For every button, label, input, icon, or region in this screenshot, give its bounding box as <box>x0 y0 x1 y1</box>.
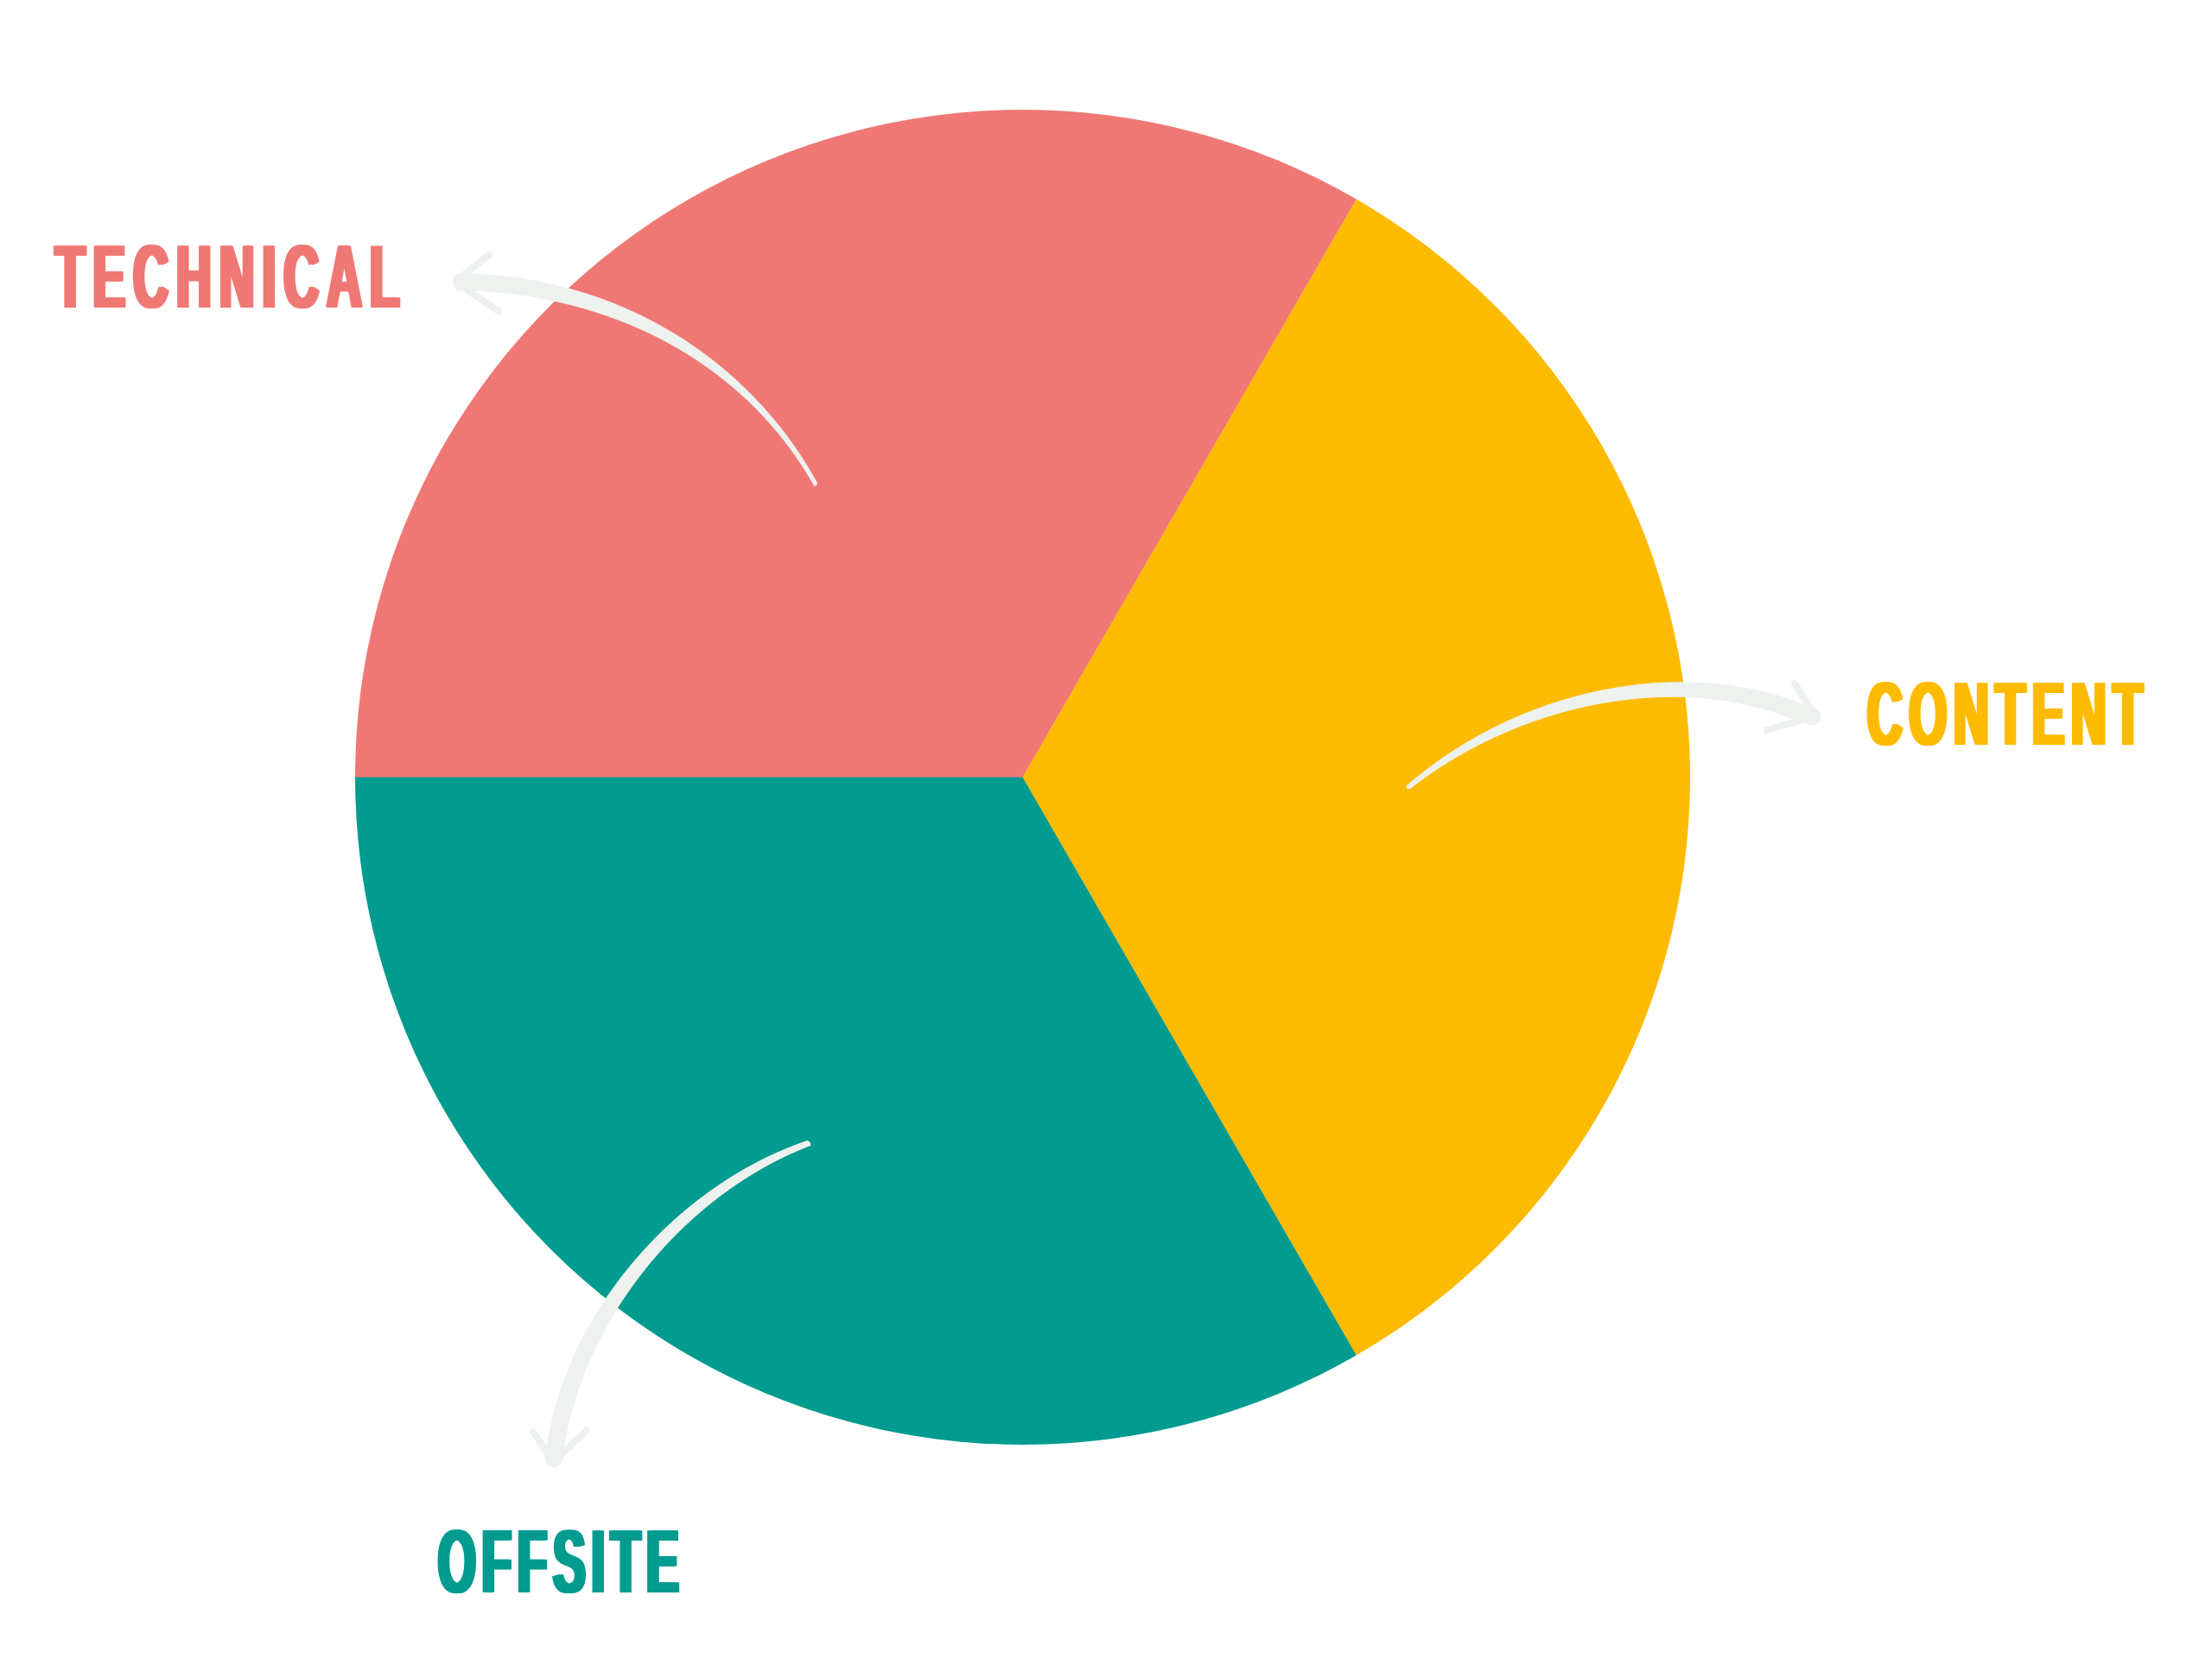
slice: content <box>1023 199 1690 1355</box>
slice: technical <box>355 110 1357 777</box>
label: technical: TECHNICAL <box>55 227 408 327</box>
pie chart <box>355 110 1690 1445</box>
label: offsite: OFFSITE <box>438 1512 685 1612</box>
arrow: offsite <box>533 1141 810 1467</box>
label: content: CONTENT <box>1867 664 2150 765</box>
slice: offsite <box>355 778 1357 1445</box>
arrow: content <box>1407 682 1821 789</box>
arrow: technical <box>453 255 817 486</box>
